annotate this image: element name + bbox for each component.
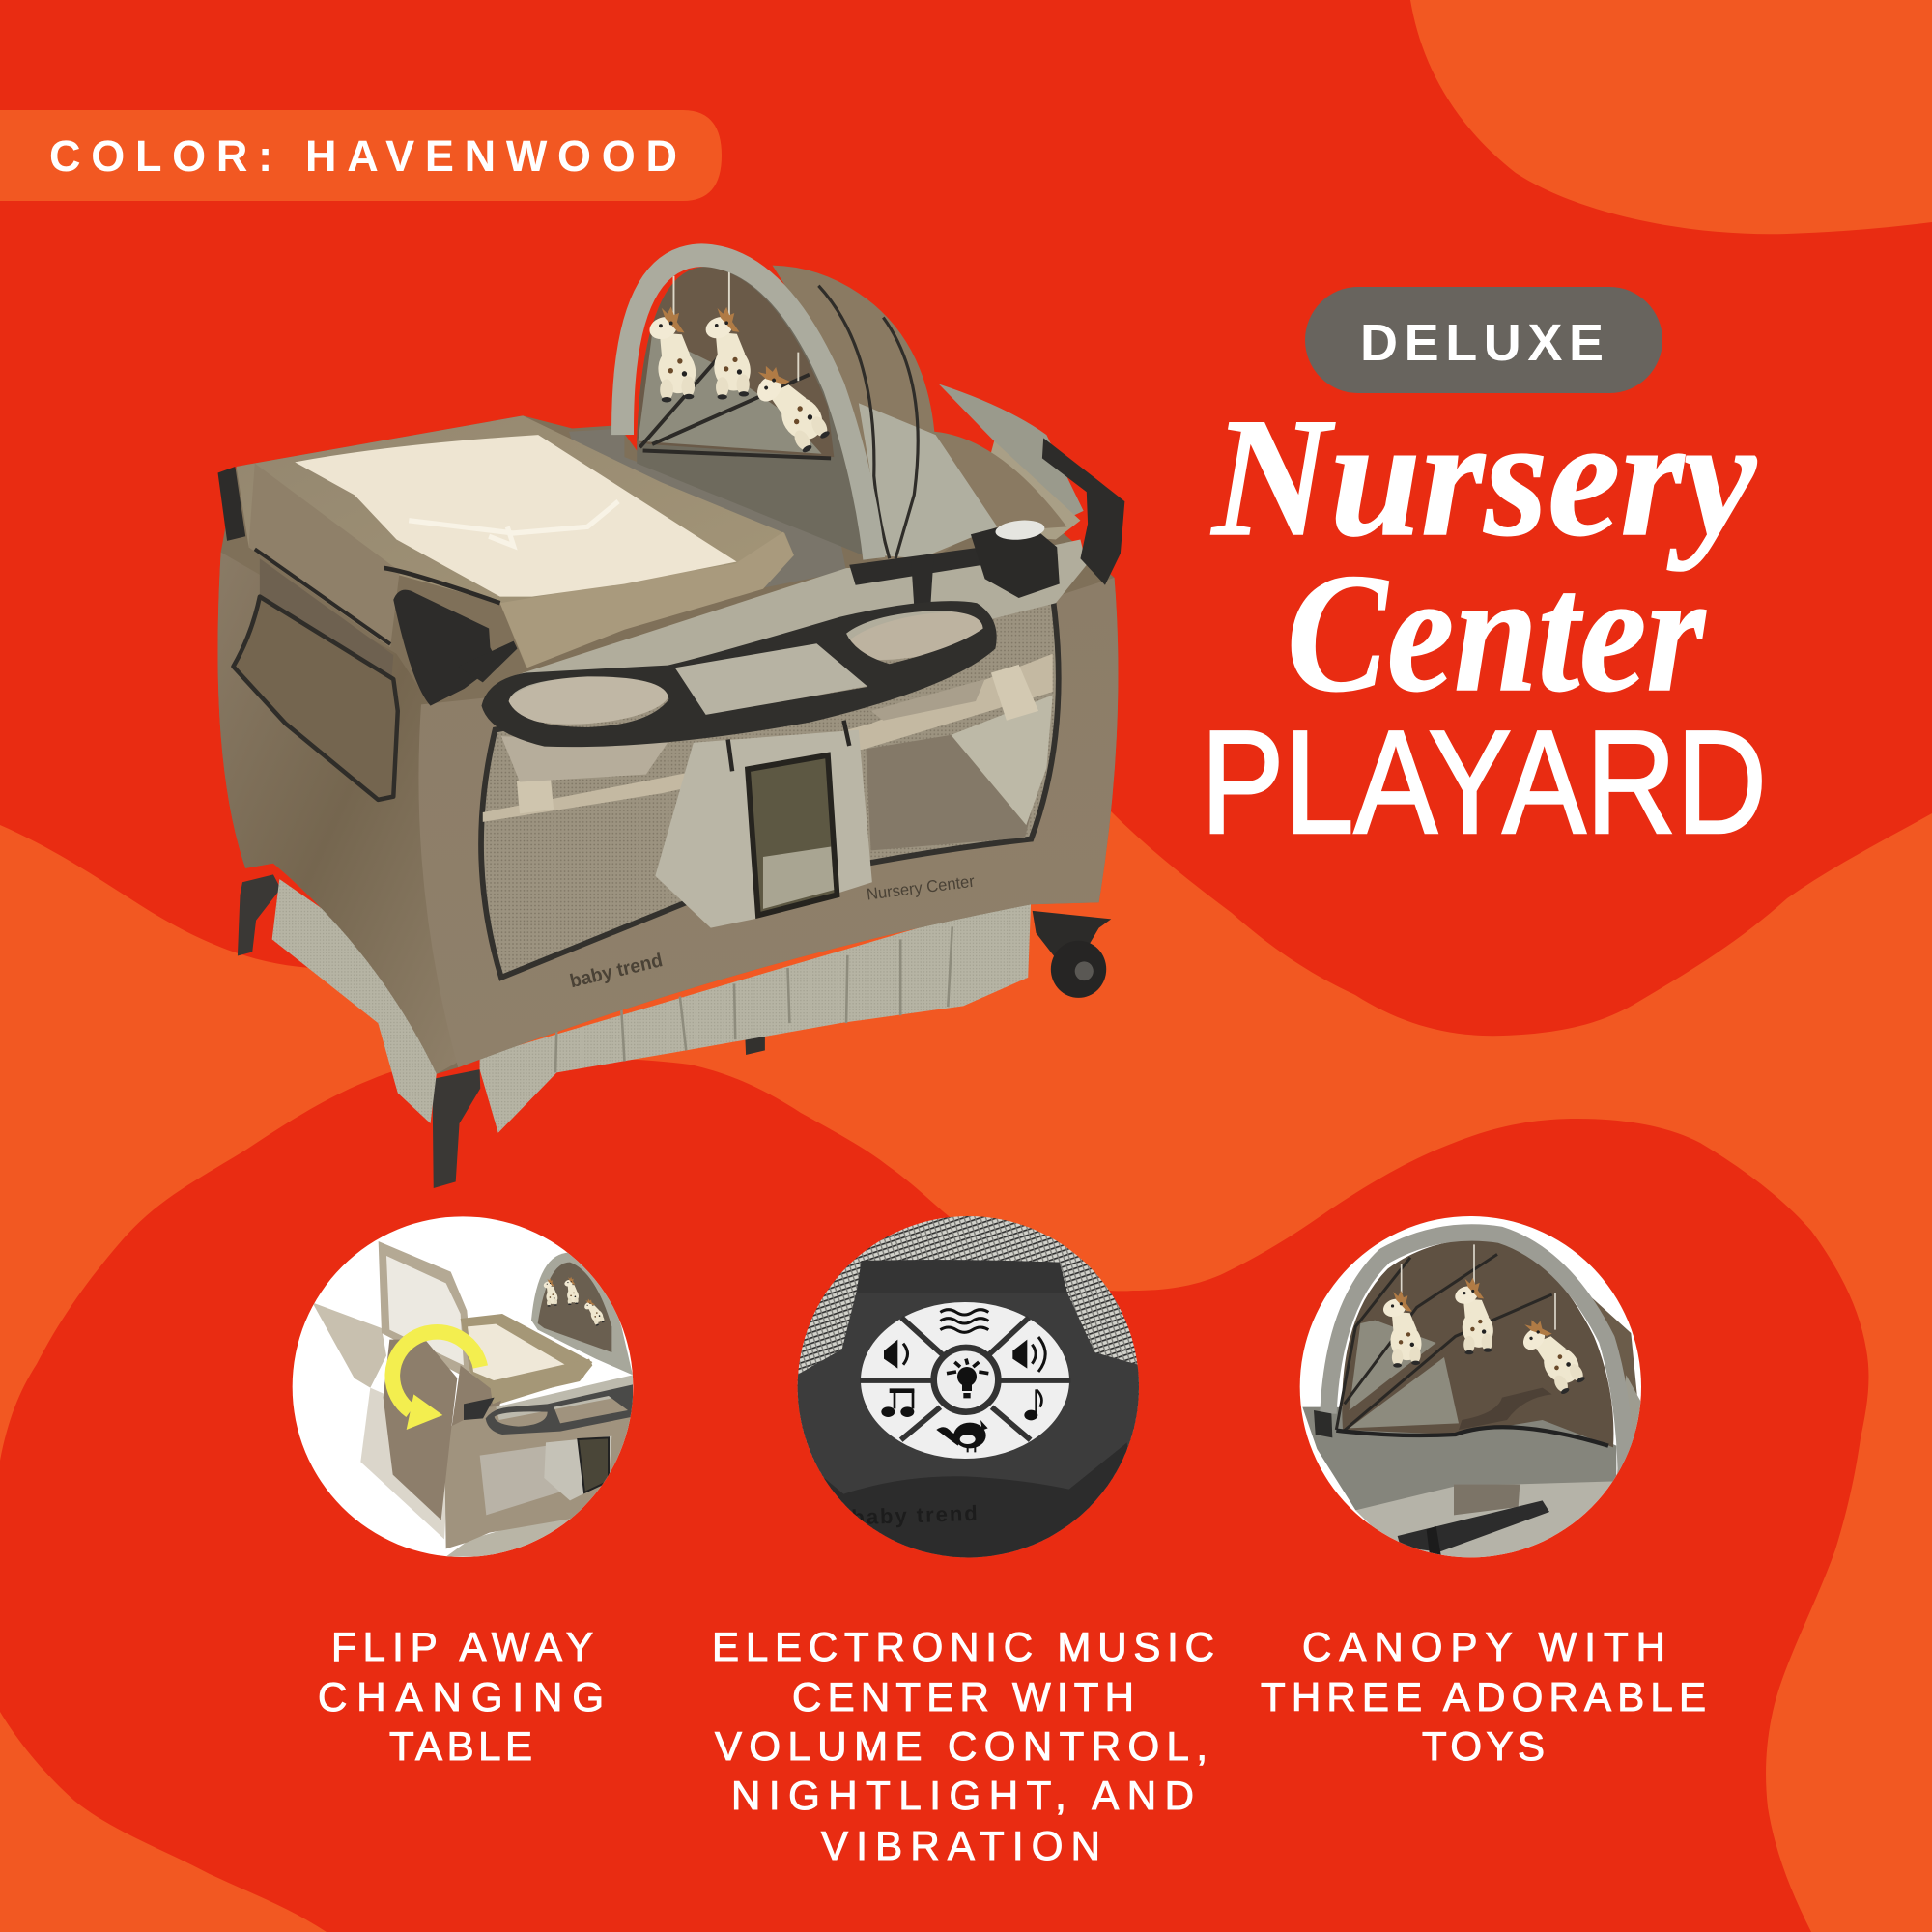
caption: flip away changing table: FLIP AWAY: [331, 1624, 593, 1669]
brand logos: Nursery Center: [866, 871, 976, 904]
caption: electronic music center: ELECTRONIC MUSIC: [712, 1624, 1214, 1669]
badge: deluxe: [1305, 287, 1662, 393]
background wave: middle band: [0, 734, 1932, 1932]
caption: electronic music center: VIBRATION: [821, 1823, 1100, 1868]
badge text: DELUXE: [1360, 314, 1604, 372]
color tag: [0, 110, 722, 201]
canopy arch: [623, 255, 874, 558]
gray top rail: [489, 540, 1087, 711]
caption: electronic music center: NIGHTLIGHT, AND: [731, 1773, 1194, 1818]
toys: [647, 307, 838, 462]
caption: canopy with toys: [1261, 1624, 1706, 1769]
control panel: [860, 1302, 1070, 1459]
base silhouette: [218, 415, 1118, 1074]
caption: electronic music center: [712, 1624, 1214, 1868]
side pocket: [233, 558, 398, 800]
caption: canopy with toys: THREE ADORABLE: [1261, 1674, 1706, 1719]
title line 1: Nursery: [1210, 384, 1757, 572]
embossed brand: baby trend: [851, 1501, 980, 1529]
black corner brackets: [218, 438, 1124, 706]
canopy interior: [569, 267, 871, 615]
brand logos: [568, 871, 976, 992]
caption: flip away changing table: TABLE: [389, 1723, 532, 1769]
caption: flip away changing table: CHANGING: [318, 1674, 604, 1719]
caption: electronic music center: CENTER WITH: [792, 1674, 1134, 1719]
tray pockets: [501, 603, 992, 781]
caption: canopy with toys: TOYS: [1422, 1723, 1545, 1769]
mesh window: [481, 597, 1059, 978]
rear canopy fabric: [773, 266, 1084, 568]
feature photo: electronic music center: [797, 1216, 1140, 1584]
background blob: lower red: [0, 1057, 1868, 1932]
legs and wheel: [238, 874, 1111, 1188]
music box on bar: [849, 519, 1060, 606]
background wave: top right: [1410, 0, 1932, 234]
caption: flip away changing table: [318, 1624, 604, 1769]
caption: electronic music center: VOLUME CONTROL,: [715, 1723, 1208, 1769]
color tag text: COLOR: HAVENWOOD: [49, 131, 677, 181]
hanging bag: [655, 721, 872, 928]
product photo: playard: [218, 255, 1124, 1188]
organizer tray: [481, 601, 997, 747]
title: [1201, 384, 1767, 865]
skirt: [272, 879, 1031, 1133]
front panel: [418, 578, 1118, 1067]
title line 3: PLAYARD: [1201, 700, 1767, 865]
side panel: [218, 553, 460, 1074]
caption: canopy with toys: CANOPY WITH: [1302, 1624, 1665, 1669]
title line 2: Center: [1287, 539, 1706, 727]
changing table frame: [237, 415, 794, 668]
brand logos: baby trend: [568, 950, 665, 992]
feature photo: flip away changing table: [293, 1216, 633, 1557]
feature photo: canopy with toys: [1300, 1216, 1642, 1558]
